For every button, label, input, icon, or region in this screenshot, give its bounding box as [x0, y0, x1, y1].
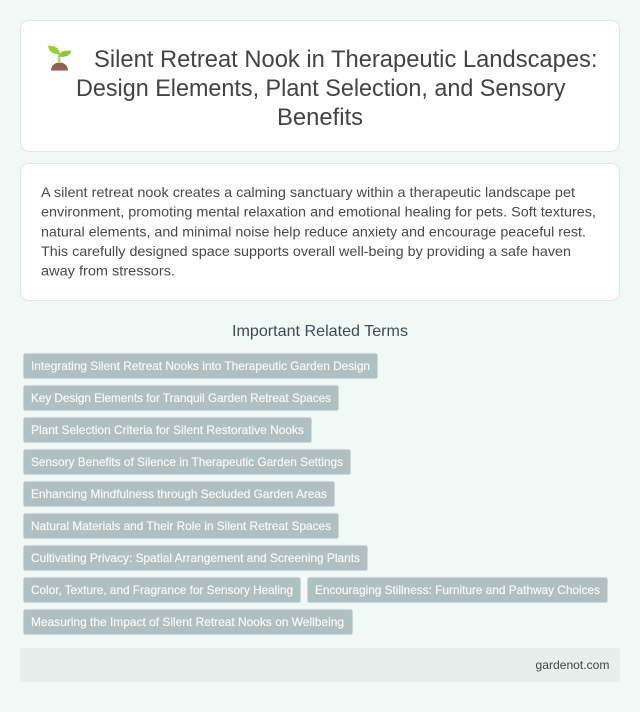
icon: sprout [48, 46, 72, 70]
title: Silent Retreat Nook in Therapeutic Landscapes: [94, 46, 598, 73]
tag 6: Natural Materials and Their Role in Silent Retreat Spaces [31, 519, 331, 533]
tag 6 [24, 514, 338, 538]
tag 4: Sensory Benefits of Silence in Therapeutic Garden Settings [31, 455, 343, 469]
tag 4 [24, 450, 350, 474]
tag 5 [24, 482, 334, 506]
tag 9 [308, 578, 608, 602]
tag 10: Measuring the Impact of Silent Retreat Nooks on Wellbeing [31, 615, 344, 629]
tag 8 [24, 578, 300, 602]
text block: description [41, 184, 596, 278]
panel: title card [20, 20, 620, 152]
tag 2: Key Design Elements for Tranquil Garden Retreat Spaces [31, 391, 331, 405]
footer text: site name: gardenot.com [536, 658, 610, 672]
title: Design Elements, Plant Selection, and Sensory [76, 75, 566, 102]
tag 7: Cultivating Privacy: Spatial Arrangement and Screening Plants [31, 551, 360, 565]
tag 3: Plant Selection Criteria for Silent Restorative Nooks [31, 423, 304, 437]
panel: related term tags [24, 354, 608, 634]
panel: description card [20, 164, 620, 300]
text block: description: away from stressors. [41, 262, 175, 278]
tag 2 [24, 386, 338, 410]
heading: important related terms: Important Related Terms [232, 323, 408, 340]
title: Benefits [277, 104, 363, 131]
text block: description: This carefully designed space supports overall well-being by providing a safe haven [41, 243, 571, 259]
text block: description: environment, promoting mental relaxation and emotional healing for pets. Soft textures, [41, 204, 596, 220]
tag 3 [24, 418, 312, 442]
text block: description: natural elements, and minimal noise help reduce anxiety and encourage peaceful rest. [41, 223, 586, 239]
tag 8: Color, Texture, and Fragrance for Sensory Healing [31, 583, 293, 597]
text block: description: A silent retreat nook creates a calming sanctuary within a therapeutic landscape pet [41, 184, 575, 200]
footer bar [20, 648, 620, 682]
tag 1: Integrating Silent Retreat Nooks into Therapeutic Garden Design [31, 359, 370, 373]
tag 9: Encouraging Stillness: Furniture and Pathway Choices [315, 583, 600, 597]
tag 1 [24, 354, 378, 378]
tag 5: Enhancing Mindfulness through Secluded Garden Areas [31, 487, 327, 501]
tag 10 [24, 610, 352, 634]
tag 7 [24, 546, 368, 570]
title [76, 46, 598, 131]
